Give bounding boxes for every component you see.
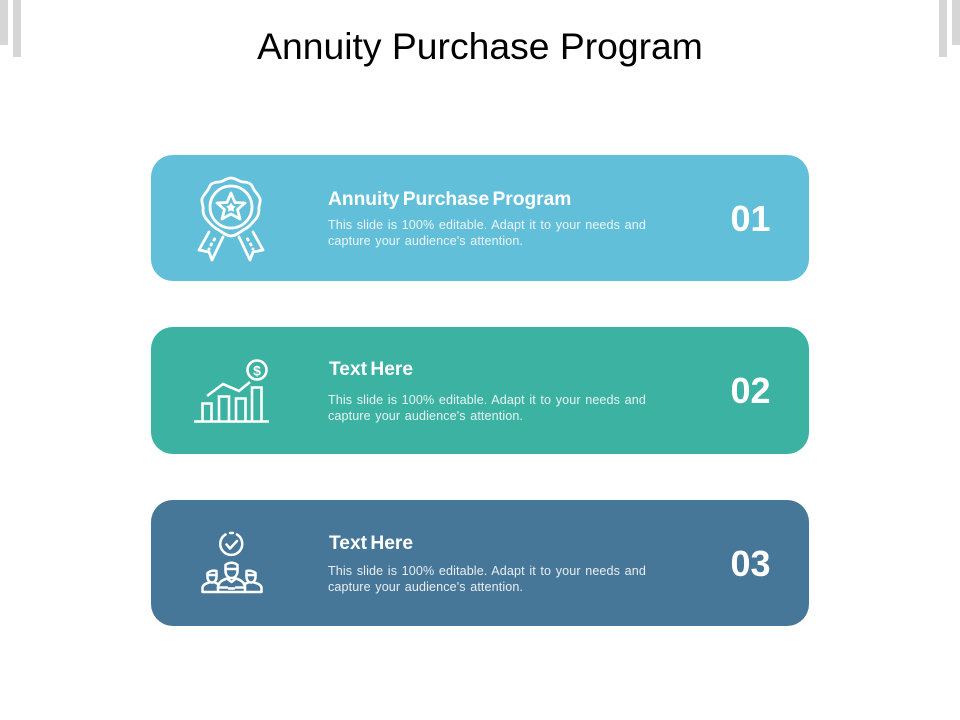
decorative tab: top left outer (0, 0, 8, 45)
decorative tab: top left inner (13, 0, 21, 57)
number: 03 (730, 543, 771, 584)
text block (328, 218, 646, 248)
icon: award ribbon (198, 176, 264, 262)
heading: Text Here (329, 358, 413, 380)
heading: Text Here (329, 532, 413, 554)
icon: team with check (201, 532, 263, 594)
text block: capture your audience's attention. (328, 234, 523, 248)
text block: capture your audience's attention. (328, 409, 523, 423)
text block: This slide is 100% editable. Adapt it to your needs and (328, 393, 646, 407)
text block (328, 564, 646, 594)
panel: 02 (151, 327, 809, 454)
text block: capture your audience's attention. (328, 580, 523, 594)
heading: Annuity Purchase Program (328, 188, 571, 210)
text block (328, 393, 646, 423)
icon: growth chart with dollar (194, 359, 269, 423)
panel: 01 (151, 155, 809, 281)
text block: This slide is 100% editable. Adapt it to your needs and (328, 218, 646, 232)
panel: 03 (151, 500, 809, 626)
icon: growth chart with dollar: $ (253, 362, 261, 378)
number: 01 (730, 198, 771, 239)
title: Annuity Purchase Program (257, 25, 703, 67)
decorative tab: top right inner (939, 0, 947, 57)
number: 02 (730, 370, 771, 411)
decorative tab: top right outer (952, 0, 960, 45)
text block: This slide is 100% editable. Adapt it to your needs and (328, 564, 646, 578)
